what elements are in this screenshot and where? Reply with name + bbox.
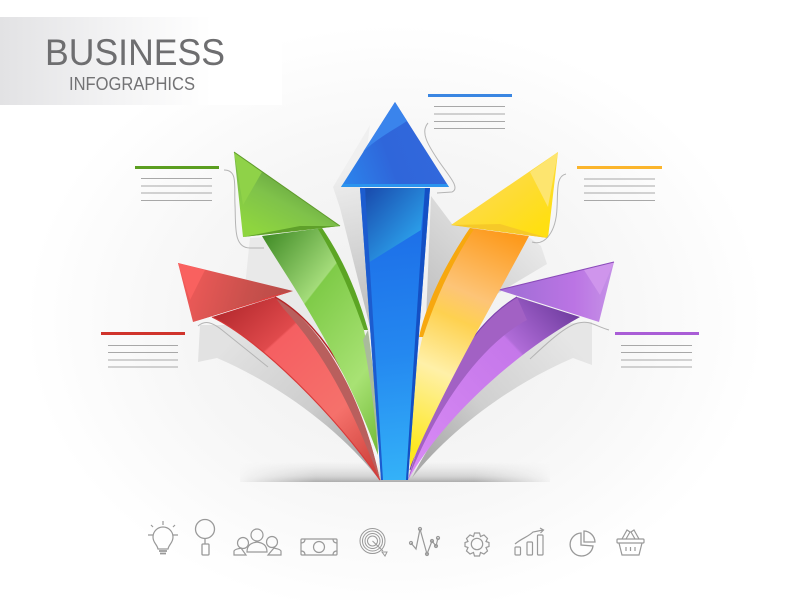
arrow shadows <box>198 125 592 478</box>
connector lines <box>198 123 609 367</box>
icon: banknote <box>301 539 337 555</box>
arrow: purple <box>408 262 614 480</box>
icon: light bulb <box>148 521 178 554</box>
icon: pie chart <box>570 531 595 556</box>
icon: line chart <box>410 528 440 556</box>
label: red <box>101 332 185 367</box>
icon: gear <box>465 533 489 556</box>
icon: team <box>234 529 281 555</box>
arrow: yellow <box>410 152 558 467</box>
title: BUSINESS <box>45 32 225 73</box>
label: yellow <box>577 166 662 200</box>
header banner <box>0 17 282 105</box>
label: purple <box>615 332 699 367</box>
icon: basket <box>617 530 644 555</box>
icon: target <box>360 528 387 556</box>
arrow: blue <box>341 102 449 480</box>
arrow: red <box>178 263 380 480</box>
label: green <box>135 166 219 200</box>
icon: growth bars <box>515 528 544 555</box>
subtitle: INFOGRAPHICS <box>69 74 195 94</box>
label: blue <box>428 94 512 128</box>
ground shadow <box>244 466 546 482</box>
icon: magnifier <box>196 520 214 555</box>
icon row <box>148 520 644 556</box>
arrow: green <box>234 152 378 455</box>
